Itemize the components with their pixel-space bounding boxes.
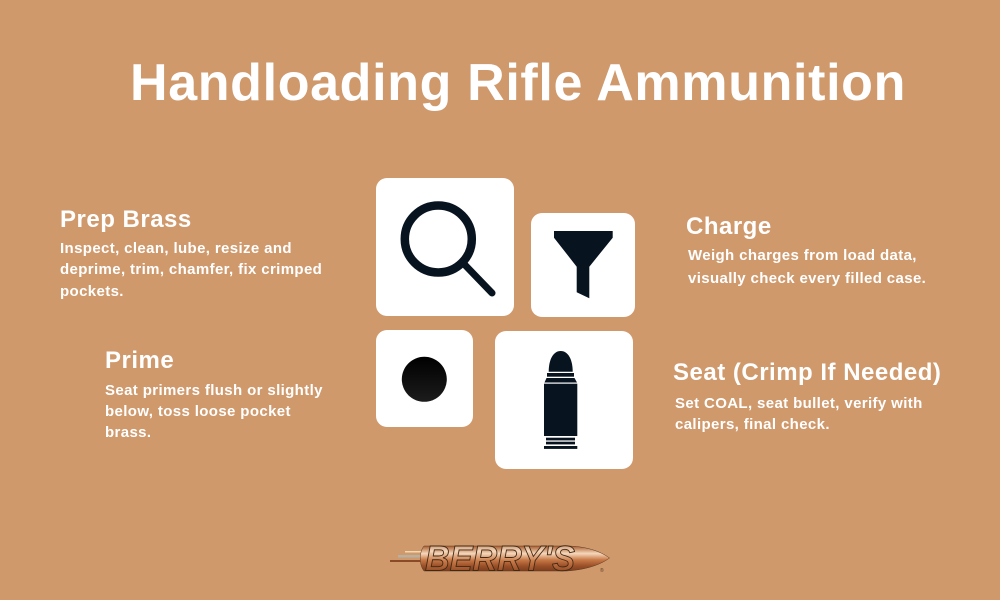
body: charge: Weigh charges from load data, [688, 247, 917, 264]
heading: seat: Seat (Crimp If Needed) [673, 359, 941, 386]
title: Handloading Rifle Ammunition [130, 54, 906, 112]
logo: Berry's: BERRY'S [425, 540, 575, 578]
card: prep brass [376, 178, 514, 316]
card: prime [376, 330, 473, 427]
heading: charge: Charge [686, 213, 772, 240]
heading: prep brass: Prep Brass [60, 206, 192, 233]
body: seat: Set COAL, seat bullet, verify with [675, 395, 923, 412]
body: prep brass [60, 240, 322, 300]
text block: seat [673, 359, 941, 433]
card: seat [495, 331, 633, 469]
body: prime: brass. [105, 424, 151, 441]
text block: prime [105, 347, 323, 441]
body: prep brass: pockets. [60, 283, 124, 300]
card: charge [531, 213, 635, 317]
heading: prime: Prime [105, 347, 174, 374]
text block: charge [686, 213, 926, 286]
body: prime: Seat primers flush or slightly [105, 382, 323, 398]
text block: prep brass [60, 206, 322, 300]
logo: Berry's [390, 540, 610, 578]
icon: primer [402, 357, 447, 402]
body: charge: visually check every filled case. [688, 270, 926, 286]
icon: cartridge [544, 351, 577, 449]
body: seat: calipers, final check. [675, 416, 830, 433]
body: prime [105, 382, 323, 441]
icon: funnel [554, 231, 613, 298]
icon: magnifying glass [405, 206, 492, 293]
body: prime: below, toss loose pocket [105, 403, 291, 420]
body: seat [675, 395, 923, 433]
body: charge [688, 247, 926, 286]
body: prep brass: deprime, trim, chamfer, fix crimped [60, 261, 322, 278]
body: prep brass: Inspect, clean, lube, resize and [60, 240, 292, 257]
logo: Berry's: ® [600, 567, 604, 574]
